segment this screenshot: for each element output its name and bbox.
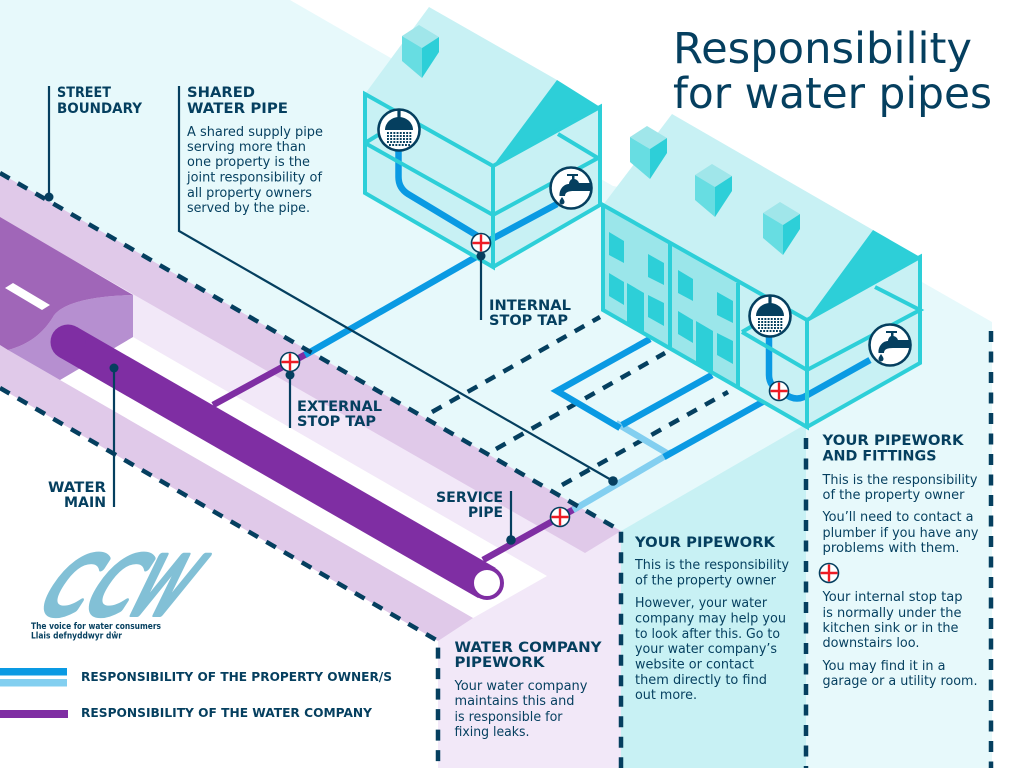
panel: your pipework and fittings: downstairs loo. — [822, 636, 920, 651]
house: detached — [365, 7, 600, 267]
legend: RESPONSIBILITY OF THE PROPERTY OWNER/S — [81, 669, 392, 684]
panel background: your pipework — [621, 424, 806, 768]
internal stop tap callout: STOP TAP — [489, 313, 568, 329]
panel: your pipework and fittings: problems with them. — [822, 541, 960, 556]
service pipe callout: SERVICE — [436, 490, 503, 506]
shared water pipe callout: joint responsibility of — [186, 170, 322, 186]
icon: row house tap — [870, 324, 910, 366]
external stop tap callout: STOP TAP — [297, 414, 376, 430]
shared water pipe callout: all property owners — [187, 186, 312, 201]
panel: water company pipework: WATER COMPANY — [454, 640, 602, 656]
title: Responsibility — [673, 24, 972, 74]
CCW logo — [21, 539, 221, 642]
shared water pipe callout — [179, 85, 618, 486]
panel: your pipework: However, your water — [635, 596, 768, 611]
pipes inside house — [398, 150, 557, 240]
panel: your pipework and fittings: Your internal stop tap — [821, 590, 962, 605]
panel: water company pipework — [453, 640, 602, 740]
panel: your pipework and fittings: AND FITTINGS — [822, 448, 936, 464]
icon: row house internal stop tap — [770, 382, 788, 400]
CCW logo: Llais defnyddwyr dŵr — [31, 632, 123, 642]
street boundary label — [44, 85, 142, 202]
panel: your pipework: your water company’s — [635, 642, 777, 657]
CCW logo: W — [109, 539, 221, 633]
panel: your pipework and fittings: is normally under the — [822, 606, 962, 621]
water main callout: WATER — [48, 480, 106, 496]
lower street boundary dashed line — [0, 388, 438, 768]
panel: your pipework: YOUR PIPEWORK — [634, 535, 776, 551]
icon: shower — [378, 110, 420, 150]
water main pipe — [50, 324, 502, 598]
shared water pipe callout: served by the pipe. — [187, 201, 310, 216]
panel: your pipework and fittings: YOUR PIPEWORK — [821, 433, 964, 449]
panel: your pipework — [634, 535, 789, 703]
panel: your pipework: to look after this. Go to — [635, 627, 780, 642]
external stop tap callout — [280, 352, 382, 430]
panel: your pipework and fittings: of the property owner — [822, 488, 965, 503]
panel: your pipework: of the property owner — [635, 574, 777, 588]
boundary dashed line: panel divider — [804, 438, 808, 768]
panel: your pipework and fittings: You’ll need to contact a — [822, 510, 974, 525]
shared water pipe callout: SHARED — [187, 85, 255, 101]
water main callout — [48, 364, 118, 511]
service pipe callout — [436, 490, 570, 545]
panel: your pipework and fittings — [820, 433, 979, 689]
title: for water pipes — [673, 69, 992, 119]
street boundary label: STREET — [57, 85, 111, 101]
CCW logo: C — [21, 539, 124, 633]
service pipe callout: PIPE — [468, 505, 503, 521]
shared water pipe callout: WATER PIPE — [187, 101, 288, 117]
panel: your pipework and fittings: You may find it in a — [822, 659, 946, 674]
row of houses — [603, 114, 920, 427]
legend: RESPONSIBILITY OF THE WATER COMPANY — [81, 705, 373, 720]
panel: water company pipework: Your water company — [453, 679, 588, 694]
panel: your pipework and fittings: kitchen sink or in the — [822, 621, 958, 636]
panel: your pipework and fittings: garage or a utility room. — [822, 674, 978, 689]
panel: your pipework and fittings: This is the responsibility — [822, 473, 978, 488]
shared water pipe callout: serving more than — [187, 140, 306, 155]
boundary dashed line: right edge — [989, 331, 993, 768]
shared water pipe callout: A shared supply pipe — [187, 125, 323, 140]
external stop tap callout: EXTERNAL — [297, 399, 382, 415]
street cross-section — [0, 173, 621, 768]
internal stop tap callout — [472, 234, 571, 329]
street boundary dashed line — [0, 173, 621, 768]
panel: water company pipework: fixing leaks. — [454, 725, 530, 740]
panel: water company pipework: maintains this and — [454, 694, 574, 709]
water main callout: MAIN — [64, 495, 106, 511]
panel: your pipework: out more. — [635, 688, 697, 703]
icon: tap — [550, 168, 592, 208]
legend — [0, 668, 392, 720]
panel: water company pipework: is responsible for — [454, 710, 563, 725]
panel: your pipework: them directly to find — [635, 673, 767, 688]
panel: your pipework: This is the responsibility — [634, 558, 789, 573]
CCW logo: The voice for water consumers — [31, 622, 161, 632]
panel background: your pipework and fittings — [806, 424, 992, 768]
icon: row house shower — [750, 296, 790, 336]
panel: water company pipework: PIPEWORK — [454, 655, 545, 671]
street boundary label: BOUNDARY — [57, 101, 142, 117]
shared water pipe callout: one property is the — [187, 155, 310, 170]
panel: your pipework: website or contact — [635, 658, 754, 672]
internal stop tap callout: INTERNAL — [489, 298, 571, 314]
title — [673, 24, 992, 119]
panel: your pipework and fittings: plumber if you have any — [822, 526, 979, 541]
pipes: service pipe and row house supply — [483, 339, 766, 560]
pipes inside row house — [769, 335, 870, 398]
pipes: shared supply to house — [213, 257, 476, 405]
dashed property boundaries — [432, 317, 728, 485]
panel: your pipework: company may help you — [635, 612, 786, 626]
CCW logo: C — [66, 539, 169, 633]
